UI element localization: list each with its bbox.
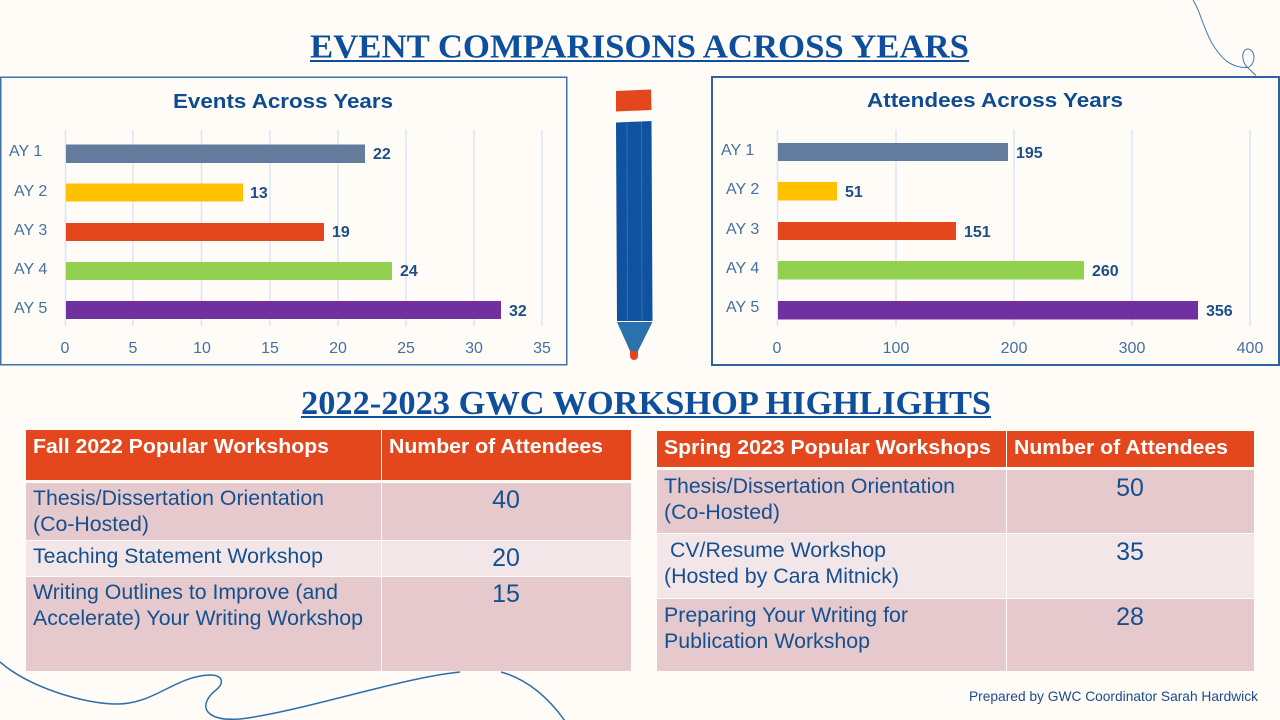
spring header row: Spring 2023 Popular Workshops xyxy=(664,437,991,459)
value labels: events: 22 xyxy=(373,146,391,163)
spring row: publication xyxy=(657,599,1254,671)
category labels: attendees: AY 1 xyxy=(721,142,754,159)
section heading: workshop highlights: 2022-2023 GWC WORKSHOP HIGHLIGHTS xyxy=(301,385,991,422)
category labels: attendees: AY 5 xyxy=(726,299,759,316)
axis labels: events: 20 xyxy=(329,340,347,357)
spring header row: Number of Attendees xyxy=(1014,437,1228,459)
fall row: teaching statement xyxy=(26,541,631,576)
spring row: thesis orientation: Thesis/Dissertation Orientation xyxy=(664,475,955,498)
axis labels: events: 5 xyxy=(129,340,138,357)
fall row: thesis orientation: 40 xyxy=(492,486,520,514)
fall row: thesis orientation: Thesis/Dissertation Orientation xyxy=(33,487,324,510)
fall row: thesis orientation xyxy=(26,483,631,540)
spring row: thesis orientation xyxy=(657,470,1254,533)
fall row: thesis orientation: (Co-Hosted) xyxy=(33,513,149,536)
spring row: publication: Publication Workshop xyxy=(664,630,870,653)
category labels: events: AY 4 xyxy=(14,261,47,278)
spring row: thesis orientation: (Co-Hosted) xyxy=(664,501,780,524)
value labels: events: 24 xyxy=(400,263,418,280)
axis labels: events: 0 xyxy=(61,340,70,357)
main title: EVENT COMPARISONS ACROSS YEARS xyxy=(310,28,969,66)
axis labels: attendees: 100 xyxy=(883,340,909,357)
value labels: attendees: 151 xyxy=(964,224,991,241)
axis labels: events xyxy=(61,340,551,357)
value labels: events: 19 xyxy=(332,224,350,241)
value labels: attendees xyxy=(845,145,1233,320)
spring row: cv resume: (Hosted by Cara Mitnick) xyxy=(664,565,899,588)
fall header row: Number of Attendees xyxy=(389,436,603,458)
value labels: attendees: 260 xyxy=(1092,263,1119,280)
spring header row xyxy=(657,431,1254,467)
axis labels: events: 10 xyxy=(193,340,211,357)
category labels: events: AY 1 xyxy=(9,143,42,160)
axis labels: events: 25 xyxy=(397,340,415,357)
value labels: attendees: 51 xyxy=(845,184,863,201)
value labels: events: 13 xyxy=(250,185,268,202)
value labels: attendees: 356 xyxy=(1206,303,1233,320)
panel: attendees bar chart xyxy=(712,77,1279,365)
gridlines xyxy=(66,130,542,326)
category labels: attendees: AY 2 xyxy=(726,181,759,198)
axis labels: events: 30 xyxy=(465,340,483,357)
fall row: teaching statement: Teaching Statement Workshop xyxy=(33,545,323,568)
gridlines xyxy=(778,130,1250,326)
category labels: events: AY 5 xyxy=(14,300,47,317)
axis labels: attendees xyxy=(773,340,1263,357)
fall row: writing outlines: 15 xyxy=(492,580,520,608)
decorative curve: bottom left xyxy=(0,662,565,720)
axis labels: events: 35 xyxy=(533,340,551,357)
value labels: attendees: 195 xyxy=(1016,145,1043,162)
category labels: events: AY 3 xyxy=(14,222,47,239)
category labels: attendees: AY 3 xyxy=(726,221,759,238)
category labels: events: AY 2 xyxy=(14,183,47,200)
spring row: cv resume: CV/Resume Workshop xyxy=(670,539,886,562)
spring row: publication: 28 xyxy=(1116,603,1144,631)
footer credit: Prepared by GWC Coordinator Sarah Hardwick xyxy=(969,688,1259,704)
category labels: events xyxy=(9,143,47,317)
value labels: events: 32 xyxy=(509,303,527,320)
panel: events bar chart xyxy=(1,77,567,365)
chart title: events: Events Across Years xyxy=(173,90,393,113)
decorative curve: top right xyxy=(1193,0,1256,76)
spring row: thesis orientation: 50 xyxy=(1116,474,1144,502)
axis labels: attendees: 0 xyxy=(773,340,782,357)
fall row: writing outlines xyxy=(26,577,631,671)
spring row: cv resume xyxy=(657,534,1254,598)
spring row: cv resume: 35 xyxy=(1116,538,1144,566)
icon: pencil xyxy=(616,90,652,360)
axis labels: attendees: 300 xyxy=(1119,340,1145,357)
fall header row: Fall 2022 Popular Workshops xyxy=(33,436,329,458)
fall row: writing outlines: Accelerate) Your Writing Workshop xyxy=(33,607,363,630)
axis labels: attendees: 200 xyxy=(1001,340,1027,357)
chart title: attendees: Attendees Across Years xyxy=(867,89,1123,112)
fall header row xyxy=(26,430,631,480)
bars: attendees xyxy=(778,143,1198,320)
table: fall 2022 workshops xyxy=(26,430,631,671)
axis labels: events: 15 xyxy=(261,340,279,357)
fall row: teaching statement: 20 xyxy=(492,544,520,572)
bars: events xyxy=(66,144,501,319)
table: spring 2023 workshops xyxy=(657,431,1254,671)
spring row: publication: Preparing Your Writing for xyxy=(664,604,908,627)
category labels: attendees xyxy=(721,142,759,316)
category labels: attendees: AY 4 xyxy=(726,260,759,277)
fall row: writing outlines: Writing Outlines to Improve (and xyxy=(33,581,338,604)
axis labels: attendees: 400 xyxy=(1237,340,1263,357)
value labels: events xyxy=(250,146,527,320)
